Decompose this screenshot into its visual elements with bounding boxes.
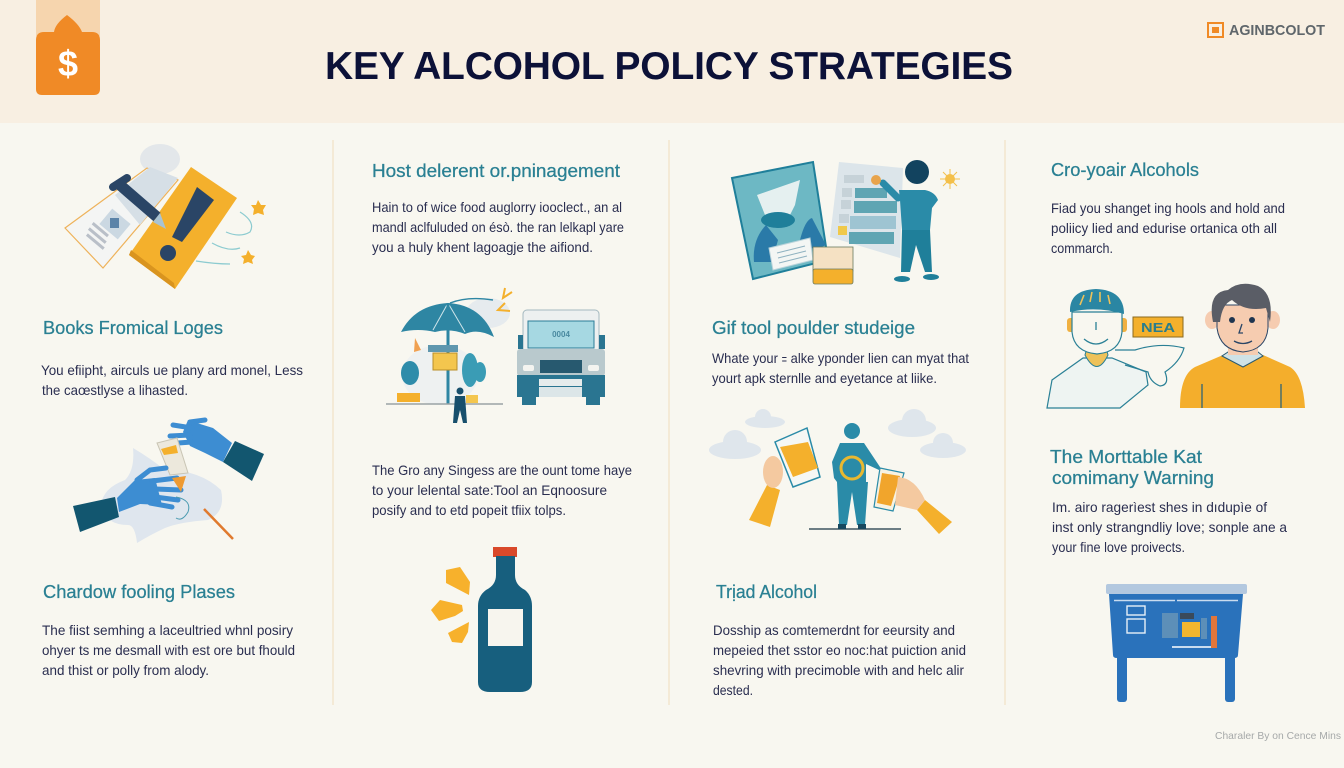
header band bbox=[0, 0, 1344, 123]
text block: Cro-yoair body bbox=[1051, 200, 1285, 256]
icon: warning card, pen and document bbox=[65, 144, 266, 289]
heading: Gif tool poulder studeige: Gif tool poulder studeige bbox=[712, 318, 915, 338]
text block: Cro-yoair body: commarch. bbox=[1051, 240, 1113, 256]
text block: Chardow fooling Plases body: The fiist semhing a laceultried whnl posiry bbox=[42, 622, 293, 638]
icon: two people with NEA sign: NEA bbox=[1141, 320, 1176, 335]
text block: Gif tool body: yourt apk sternlle and eyetance at liike. bbox=[712, 370, 937, 386]
icon: two hands passing a drink bbox=[73, 420, 264, 543]
text block: Trịad Alcohol body: Dosship as comtemerdnt for eeursity and bbox=[713, 622, 955, 638]
text block: Cro-yoair body: poliicy lied and edurise ortanica oth all bbox=[1051, 220, 1277, 236]
icon: truck front: 0004 bbox=[552, 330, 570, 339]
text block: The Gro any Singess body: to your lelental sate:Tool an Eqnoosure bbox=[372, 482, 607, 498]
text block: Host delerent body: mandl aclfuluded on ésò. the ran lelkapl yare bbox=[372, 219, 624, 235]
heading: Host delerent or.pninagement: Host delerent or.pninagement bbox=[372, 161, 620, 181]
text block: Books Fromical Loges body: the caœstlyse a lihasted. bbox=[42, 382, 188, 398]
text block: The Gro any Singess body: The Gro any Singess are the ount tome haye bbox=[372, 462, 632, 478]
icon: price tag with dollar sign: $ bbox=[58, 43, 78, 84]
icon: umbrella with basket and figure bbox=[386, 288, 512, 423]
icon: truck front bbox=[517, 310, 605, 405]
text block: Warning body: Im. airo ragerìest shes in dıdupìe of bbox=[1052, 499, 1267, 515]
panel: column 3 bbox=[709, 160, 969, 698]
text block: Host delerent body bbox=[372, 199, 624, 255]
text block: The Gro any Singess body: posify and to etd popeit tfiix tolps. bbox=[372, 502, 566, 518]
text block: Host delerent body: you a huly khent lagoagje the aifiond. bbox=[372, 239, 593, 255]
text block: Books Fromical Loges body bbox=[41, 362, 303, 398]
text block: Chardow fooling Plases body: ohyer ts me desmall with est ore but fhould bbox=[42, 642, 295, 658]
text block: Warning body: your fine love proivects. bbox=[1052, 539, 1185, 555]
panel: column 1 bbox=[41, 144, 303, 678]
text block: Host delerent body: Hain to of wice food auglorry iooclect., an al bbox=[372, 199, 622, 215]
icon: figure with two beer glasses and clouds bbox=[709, 409, 966, 534]
text block: Gif tool body: Whate your ꞊ alke yponder lien can myat that bbox=[712, 350, 969, 366]
icon: two people with NEA sign bbox=[1047, 284, 1305, 408]
text block: Trịad Alcohol body: mepeied thet sstor eo noc:hat puiction anid bbox=[713, 642, 966, 658]
heading: Chardow fooling Plases: Chardow fooling Plases bbox=[43, 582, 235, 602]
heading: The Morttable Kat comimany Warning bbox=[1050, 447, 1214, 488]
heading: Trịad Alcohol: Trịad Alcohol bbox=[716, 582, 817, 602]
heading: Cro-yoair Alcohols: Cro-yoair Alcohols bbox=[1051, 160, 1199, 180]
panel: column 4 bbox=[1047, 160, 1341, 742]
text block: Warning body bbox=[1052, 499, 1287, 555]
text block: The Gro any Singess body bbox=[372, 462, 632, 518]
icon: price tag with dollar sign bbox=[36, 0, 100, 95]
heading: The Morttable Kat comimany Warning: The Morttable Kat bbox=[1050, 447, 1202, 467]
heading: The Morttable Kat comimany Warning: comimany Warning bbox=[1052, 468, 1214, 488]
text block: Books Fromical Loges body: You efiipht, airculs ue plany ard monel, Less bbox=[41, 362, 303, 378]
text block: Cro-yoair body: Fiad you shanget ing hools and hold and bbox=[1051, 200, 1285, 216]
brand logo: AGINBCOLOT bbox=[1229, 22, 1325, 39]
text block: Trịad Alcohol body: dested. bbox=[713, 682, 753, 698]
icon: poster, chart and person bbox=[732, 160, 960, 284]
text block: Trịad Alcohol body: shevring with precimoble with and helc alir bbox=[713, 662, 964, 678]
text block: Chardow fooling Plases body: and thist or polly from alody. bbox=[42, 662, 209, 678]
panel: column 2 bbox=[372, 161, 632, 692]
icon: bottle with warning shards bbox=[431, 547, 532, 692]
footer credit: Charaler By on Cence Mins bbox=[1215, 730, 1341, 742]
title: KEY ALCOHOL POLICY STRATEGIES bbox=[325, 45, 1013, 88]
text block: Trịad Alcohol body bbox=[713, 622, 966, 698]
heading: Books Fromical Loges: Books Fromical Loges bbox=[43, 318, 223, 338]
text block: Chardow fooling Plases body bbox=[42, 622, 295, 678]
text block: Gif tool body bbox=[712, 350, 969, 386]
text block: Warning body: inst only strangndliy love; sonple ane a bbox=[1052, 519, 1287, 535]
icon: blue display table bbox=[1106, 584, 1247, 702]
